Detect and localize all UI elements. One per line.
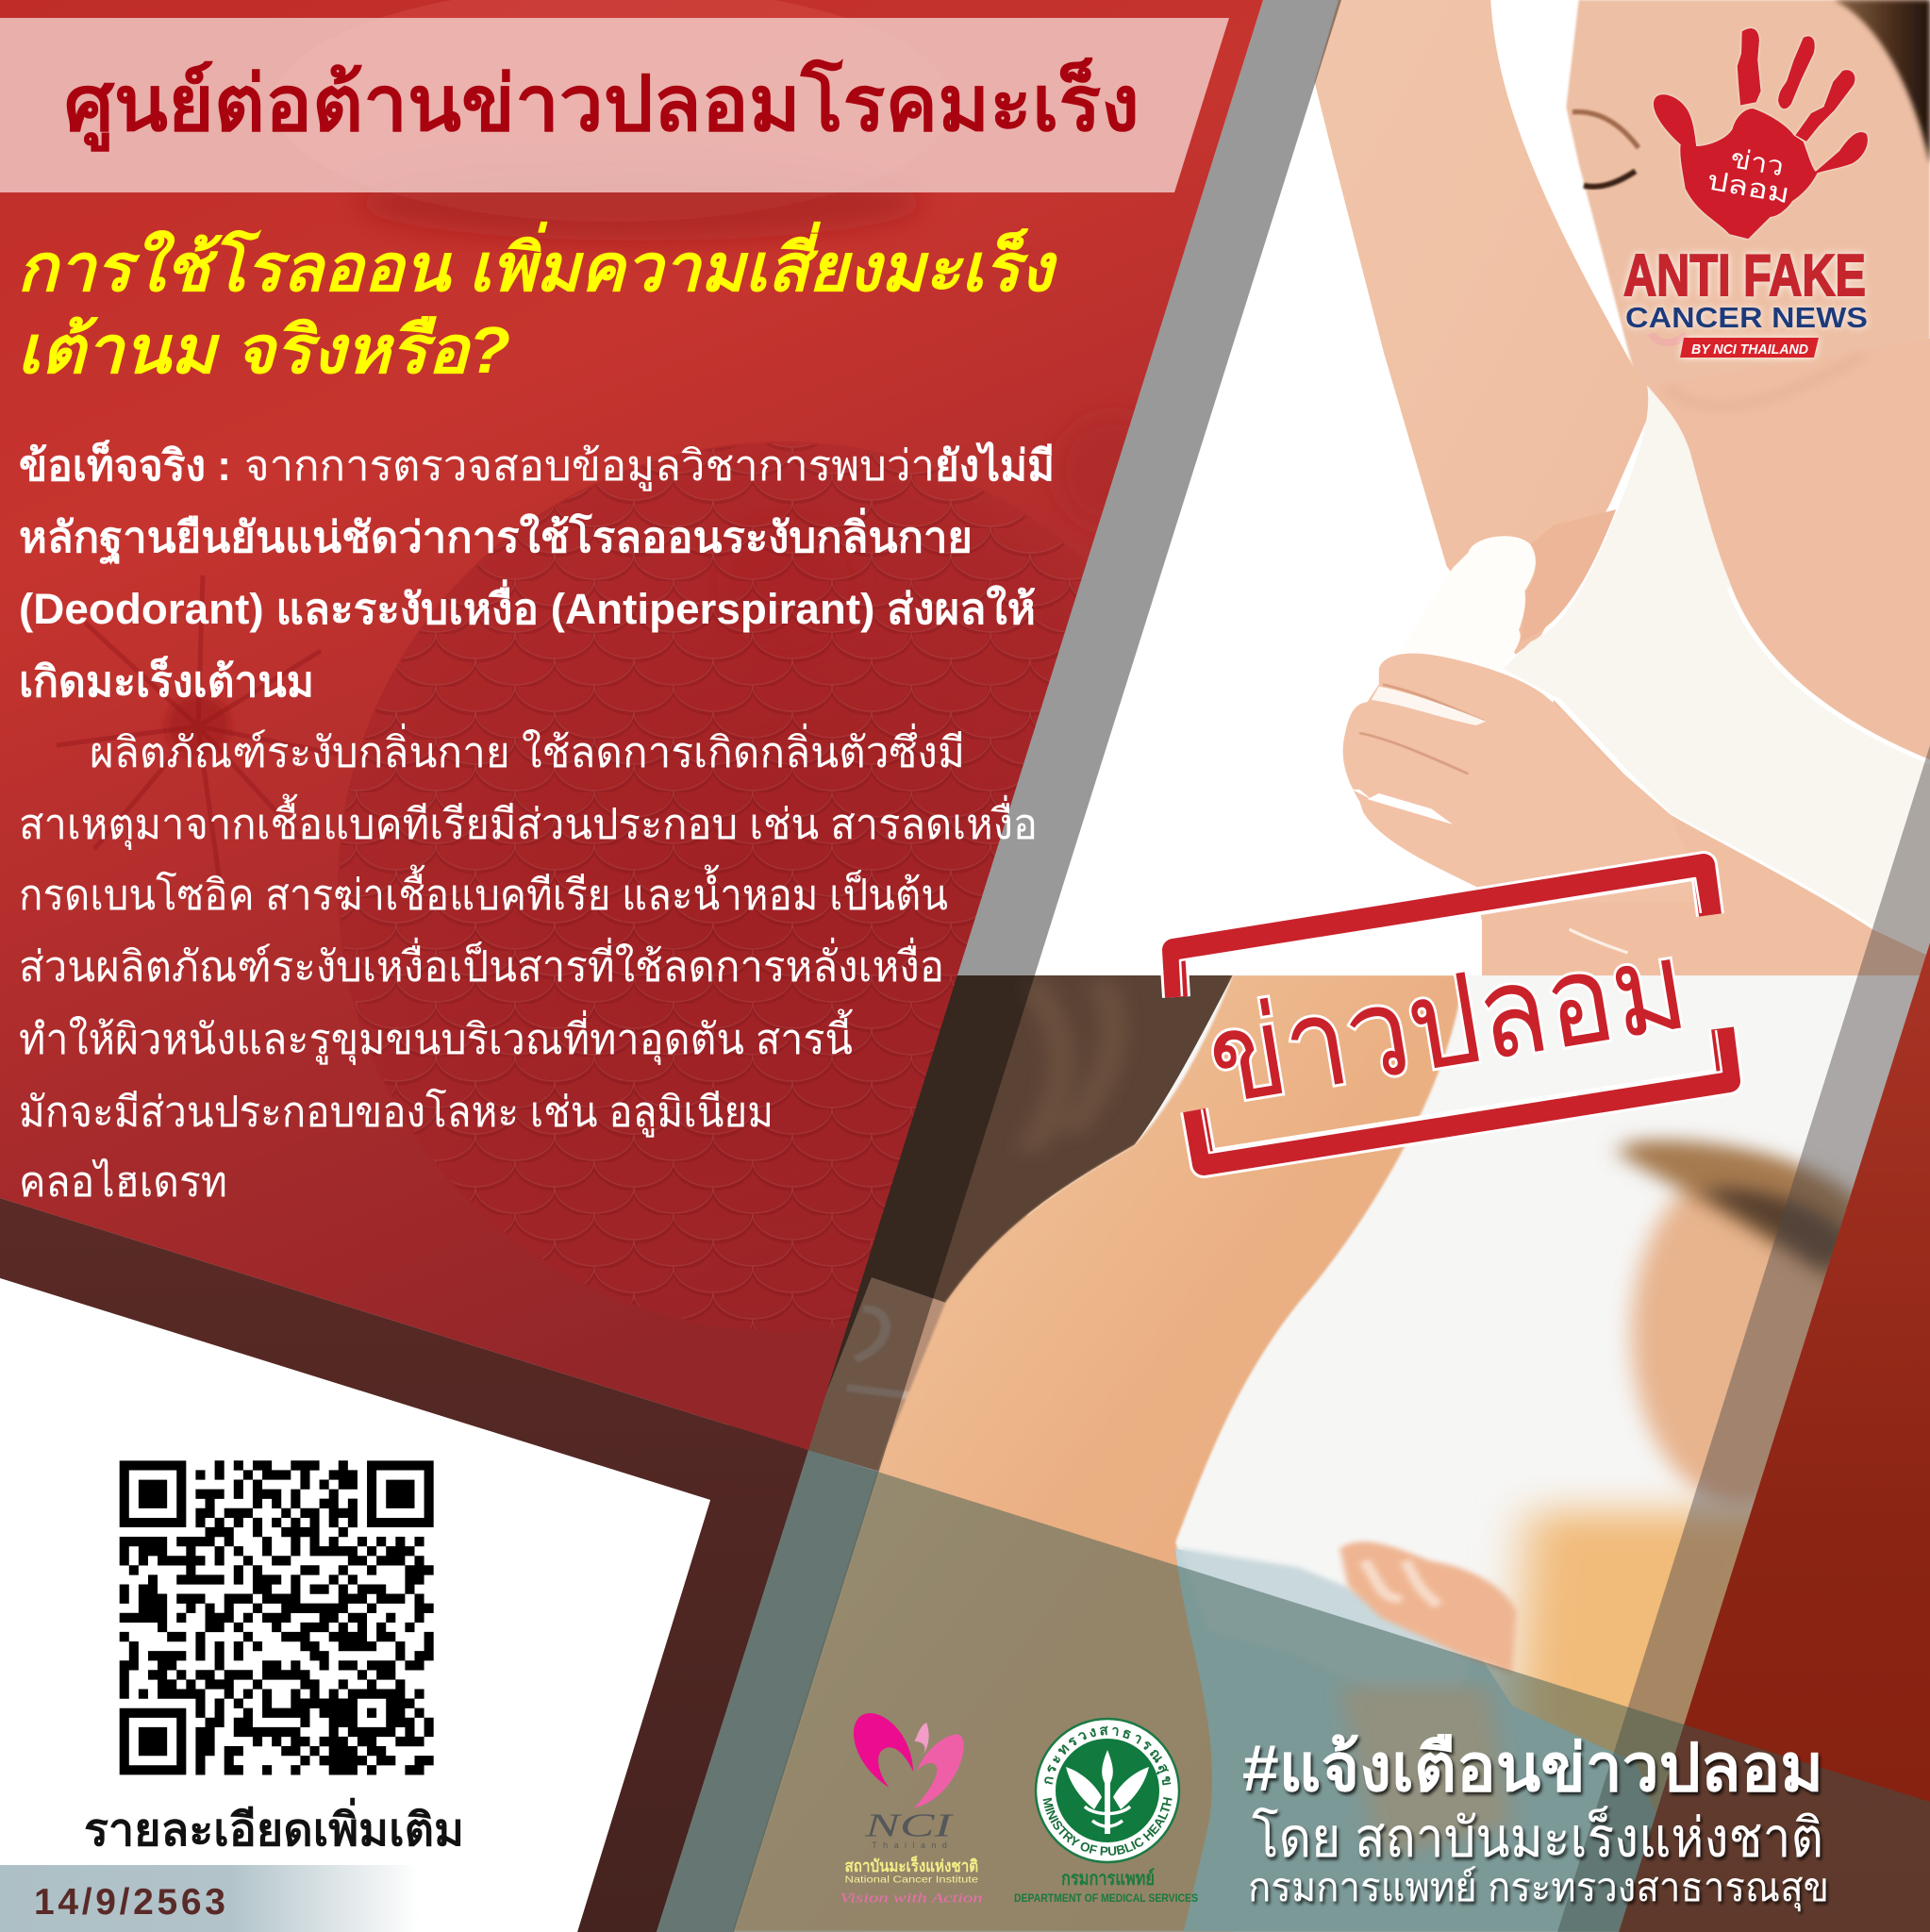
fact text block <box>19 440 1055 1206</box>
title: ศูนย์ต่อต้านข่าวปลอมโรคมะเร็ง <box>64 57 1140 152</box>
stamp bracket bottom <box>1194 1028 1729 1164</box>
translucent grey diagonal band <box>657 0 1341 1932</box>
footer credit text: โดย สถาบันมะเร็งแห่งชาติ <box>1252 1806 1823 1869</box>
logo: Ministry of Public Health <box>1014 1717 1198 1905</box>
stamp word: ข่าวปลอม <box>1199 915 1696 1130</box>
logo: National Cancer Institute: Thailand <box>872 1840 947 1850</box>
fact text block: สาเหตุมาจากเชื้อแบคทีเรียมีส่วนประกอบ เช่น สารลดเหงื่อ <box>19 793 1038 850</box>
QR caption: รายละเอียดเพิ่มเติม <box>84 1797 464 1856</box>
photo: woman applying deodorant (lower, blurred) <box>728 975 1857 1932</box>
roll-on bottle <box>1451 536 1536 652</box>
logo: National Cancer Institute: Vision with Action <box>840 1891 983 1907</box>
icon: red hand print: ข่าว <box>1728 143 1786 181</box>
fact text block: คลอไฮเดรท <box>19 1158 227 1206</box>
right translucent grey band <box>1557 745 1930 1932</box>
fact text block: ส่วนผลิตภัณฑ์ระงับเหงื่อเป็นสารที่ใช้ลดการหลั่งเหงื่อ <box>19 937 944 991</box>
yellow question heading: เต้านม จริงหรือ? <box>17 313 510 387</box>
seal <box>1036 1719 1179 1862</box>
icon: pink ribbon heart <box>854 1713 964 1808</box>
yellow question heading: การใช้โรลออน เพิ่มความเสี่ยงมะเร็ง <box>17 221 1057 305</box>
yellow question heading <box>17 221 1057 387</box>
stamp: fake news <box>1173 865 1729 1164</box>
fact text block: ทำให้ผิวหนังและรูขุมขนบริเวณที่ทาอุดตัน สารนี้ <box>19 1008 853 1065</box>
photo: woman applying roll-on (upper) <box>1315 0 1930 975</box>
footer credit text: กรมการแพทย์ กระทรวงสาธารณสุข <box>1248 1865 1829 1912</box>
fact text block: เกิดมะเร็งเต้านม <box>19 656 314 706</box>
wordmark: CANCER NEWS <box>1625 301 1868 334</box>
panel: red background with cancer cell <box>0 0 1264 1453</box>
icon: caduceus emblem <box>1066 1750 1149 1834</box>
header banner <box>0 18 1229 192</box>
fact text block: ผลิตภัณฑ์ระงับกลิ่นกาย ใช้ลดการเกิดกลิ่นตัวซึ่งมี <box>90 723 965 776</box>
NCI script mark: NCI <box>864 1807 954 1844</box>
forearm <box>1476 700 1930 987</box>
fact text block: ข้อเท็จจริง : <box>19 440 231 490</box>
neck and chest <box>1651 339 1930 760</box>
brown diagonal frame <box>0 1198 808 1932</box>
bottom translucent overlay <box>657 1450 1930 1932</box>
wordmark <box>1623 243 1868 358</box>
white QR panel <box>0 1278 710 1932</box>
fact text block: มักจะมีส่วนประกอบของโลหะ เช่น อลูมิเนียม <box>19 1088 774 1138</box>
logo: Ministry of Public Health: กรมการแพทย์ <box>1061 1868 1155 1890</box>
fact text block: กรดเบนโซอิค สารฆ่าเชื้อแบคทีเรีย และน้ำหอม เป็นต้น <box>19 864 948 919</box>
fact text block: ยังไม่มี <box>935 441 1055 490</box>
QR code <box>120 1460 434 1774</box>
logo: National Cancer Institute <box>840 1713 983 1907</box>
icon: red hand print: ปลอม <box>1705 165 1792 208</box>
footer credit text <box>1242 1731 1829 1912</box>
white tank top <box>1504 385 1930 987</box>
wordmark: BY NCI THAILAND <box>1691 341 1808 358</box>
fact text block: จากการตรวจสอบข้อมูลวิชาการพบว่า <box>244 441 935 491</box>
date strip <box>0 1865 420 1932</box>
logo: Ministry of Public Health: MINISTRY OF PUBLIC HEALTH <box>1043 1797 1173 1856</box>
logo: National Cancer Institute: National Cancer Institute <box>845 1875 979 1886</box>
icon: red hand print <box>1654 28 1868 239</box>
wordmark: ANTI FAKE <box>1623 243 1866 308</box>
hand <box>1343 653 1628 887</box>
underarm shadow <box>1521 509 1616 641</box>
logo: National Cancer Institute: สถาบันมะเร็งแห่งชาติ <box>845 1855 978 1875</box>
date strip: 14/9/2563 <box>34 1882 225 1923</box>
logo: Ministry of Public Health: กระทรวงสาธารณสุข <box>1044 1726 1172 1785</box>
stamp bracket top <box>1173 865 1710 997</box>
logo: Anti Fake Cancer News <box>1623 28 1868 358</box>
footer credit text: #แจ้งเตือนข่าวปลอม <box>1242 1731 1823 1805</box>
right red diagonal panel <box>1619 942 1930 1932</box>
fact text block: (Deodorant) และระงับเหงื่อ (Antiperspirant) ส่งผลให้ <box>19 579 1036 633</box>
logo: Ministry of Public Health: DEPARTMENT OF MEDICAL SERVICES <box>1014 1891 1198 1905</box>
fact text block: หลักฐานยืนยันแน่ชัดว่าการใช้โรลออนระงับกลิ่นกาย <box>19 508 973 565</box>
